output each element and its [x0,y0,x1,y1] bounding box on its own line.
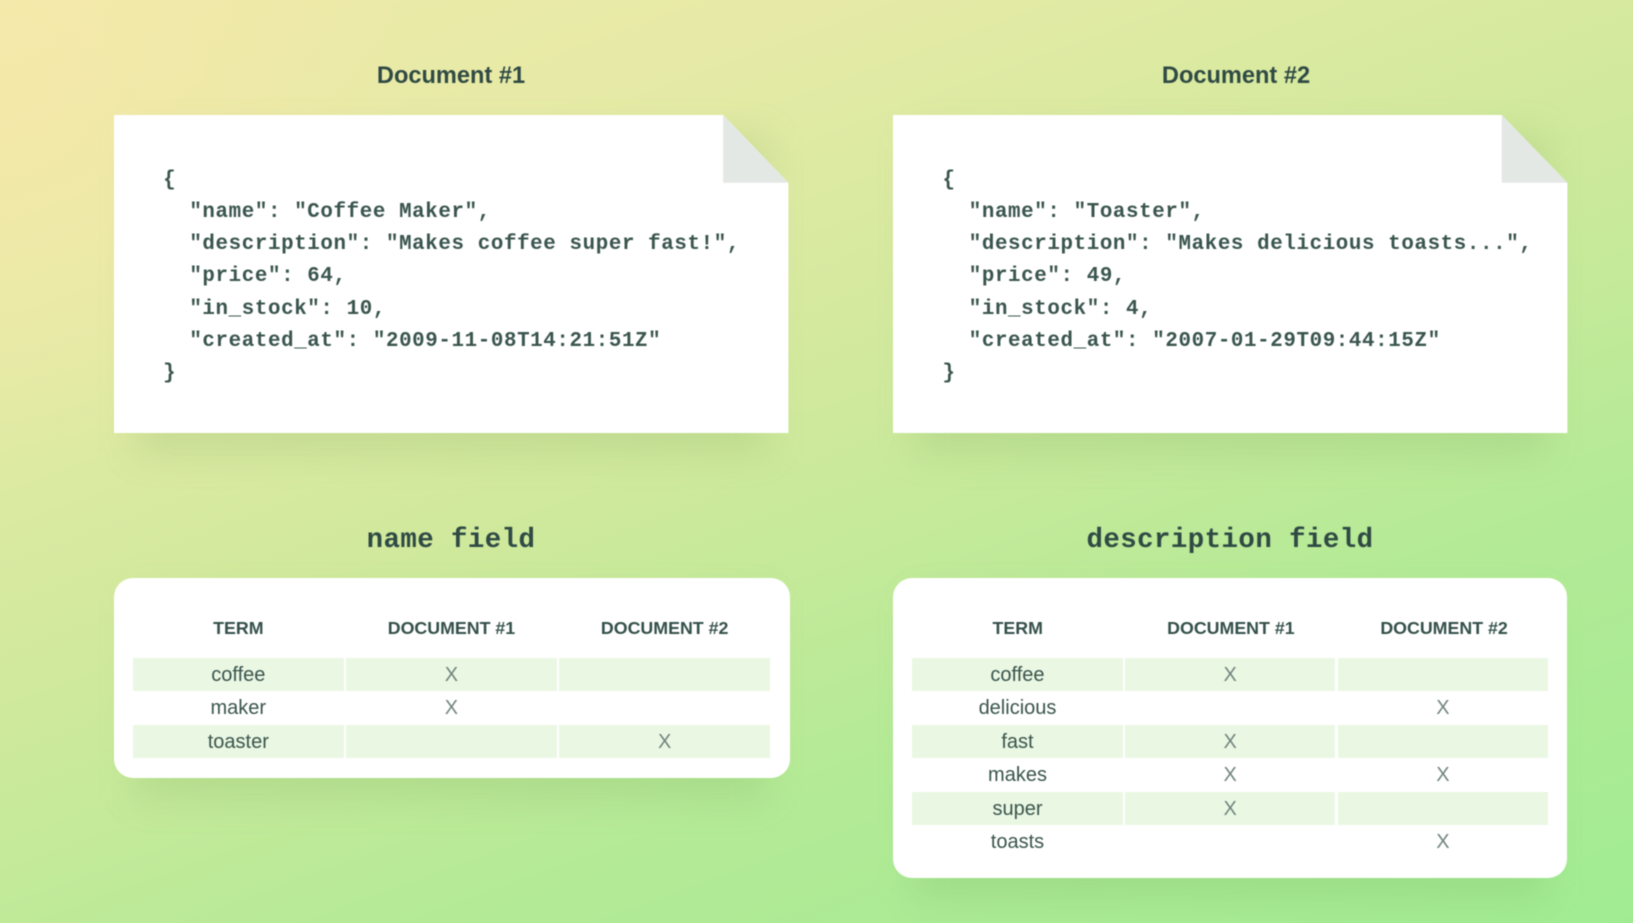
code: document 2: { "name": "Toaster", "description": "Makes delicious toasts...", "price": 49, "in_stock": 4, "created_at": "2007-01-29T09:44:15Z" } [942,169,1532,385]
panel: name field table [114,578,790,778]
row: coffee: coffee [990,664,1045,686]
heading: Document #2: Document #2 [1162,63,1310,89]
table header [992,618,1508,638]
row: makes: X [1436,764,1450,786]
row: super [912,792,1548,826]
icon: page shape with folded corner [892,114,1568,434]
row: super: X [1224,798,1237,820]
table header: DOCUMENT #1 [388,618,515,638]
heading: Document #1: Document #1 [377,63,525,89]
row: toasts: X [1436,831,1450,853]
row: coffee: coffee [211,664,265,686]
row: fast [912,724,1548,758]
row: toasts: toasts [991,831,1044,853]
table header [212,618,728,638]
row: fast: fast [1001,731,1034,753]
row: toaster: X [658,731,671,753]
panel: description field table [893,578,1567,878]
row: maker [211,697,458,719]
table header: DOCUMENT #2 [1380,618,1508,638]
row: coffee [132,658,770,692]
heading: description field: description field [1086,525,1374,556]
table header: TERM [993,618,1043,638]
row: super: super [992,798,1042,820]
table header: TERM [213,618,264,638]
heading: name field: name field [367,525,535,556]
row: delicious: delicious [979,697,1056,719]
row: coffee [912,658,1548,692]
panel: document 2 JSON [892,114,1568,434]
table header: DOCUMENT #2 [601,618,728,638]
row: delicious [978,697,1450,719]
row: coffee: X [445,664,458,686]
row: maker: X [445,697,458,719]
row: fast: X [1224,731,1237,753]
table header: DOCUMENT #1 [1167,618,1295,638]
panel: document 1 JSON [114,114,789,434]
row: toasts [990,831,1450,853]
code: document 1: { "name": "Coffee Maker", "description": "Makes coffee super fast!", "price": 64, "in_stock": 10, "created_at": "2009-11-08T14:21:51Z" } [163,169,740,385]
row: delicious: X [1436,697,1450,719]
icon: page shape with folded corner [114,114,789,434]
row: makes: X [1224,764,1237,786]
row: makes: makes [988,764,1047,786]
row: toaster [132,724,770,758]
row: toaster: toaster [208,731,269,753]
row: makes [988,764,1450,786]
row: coffee: X [1224,664,1237,686]
row: maker: maker [211,697,266,719]
